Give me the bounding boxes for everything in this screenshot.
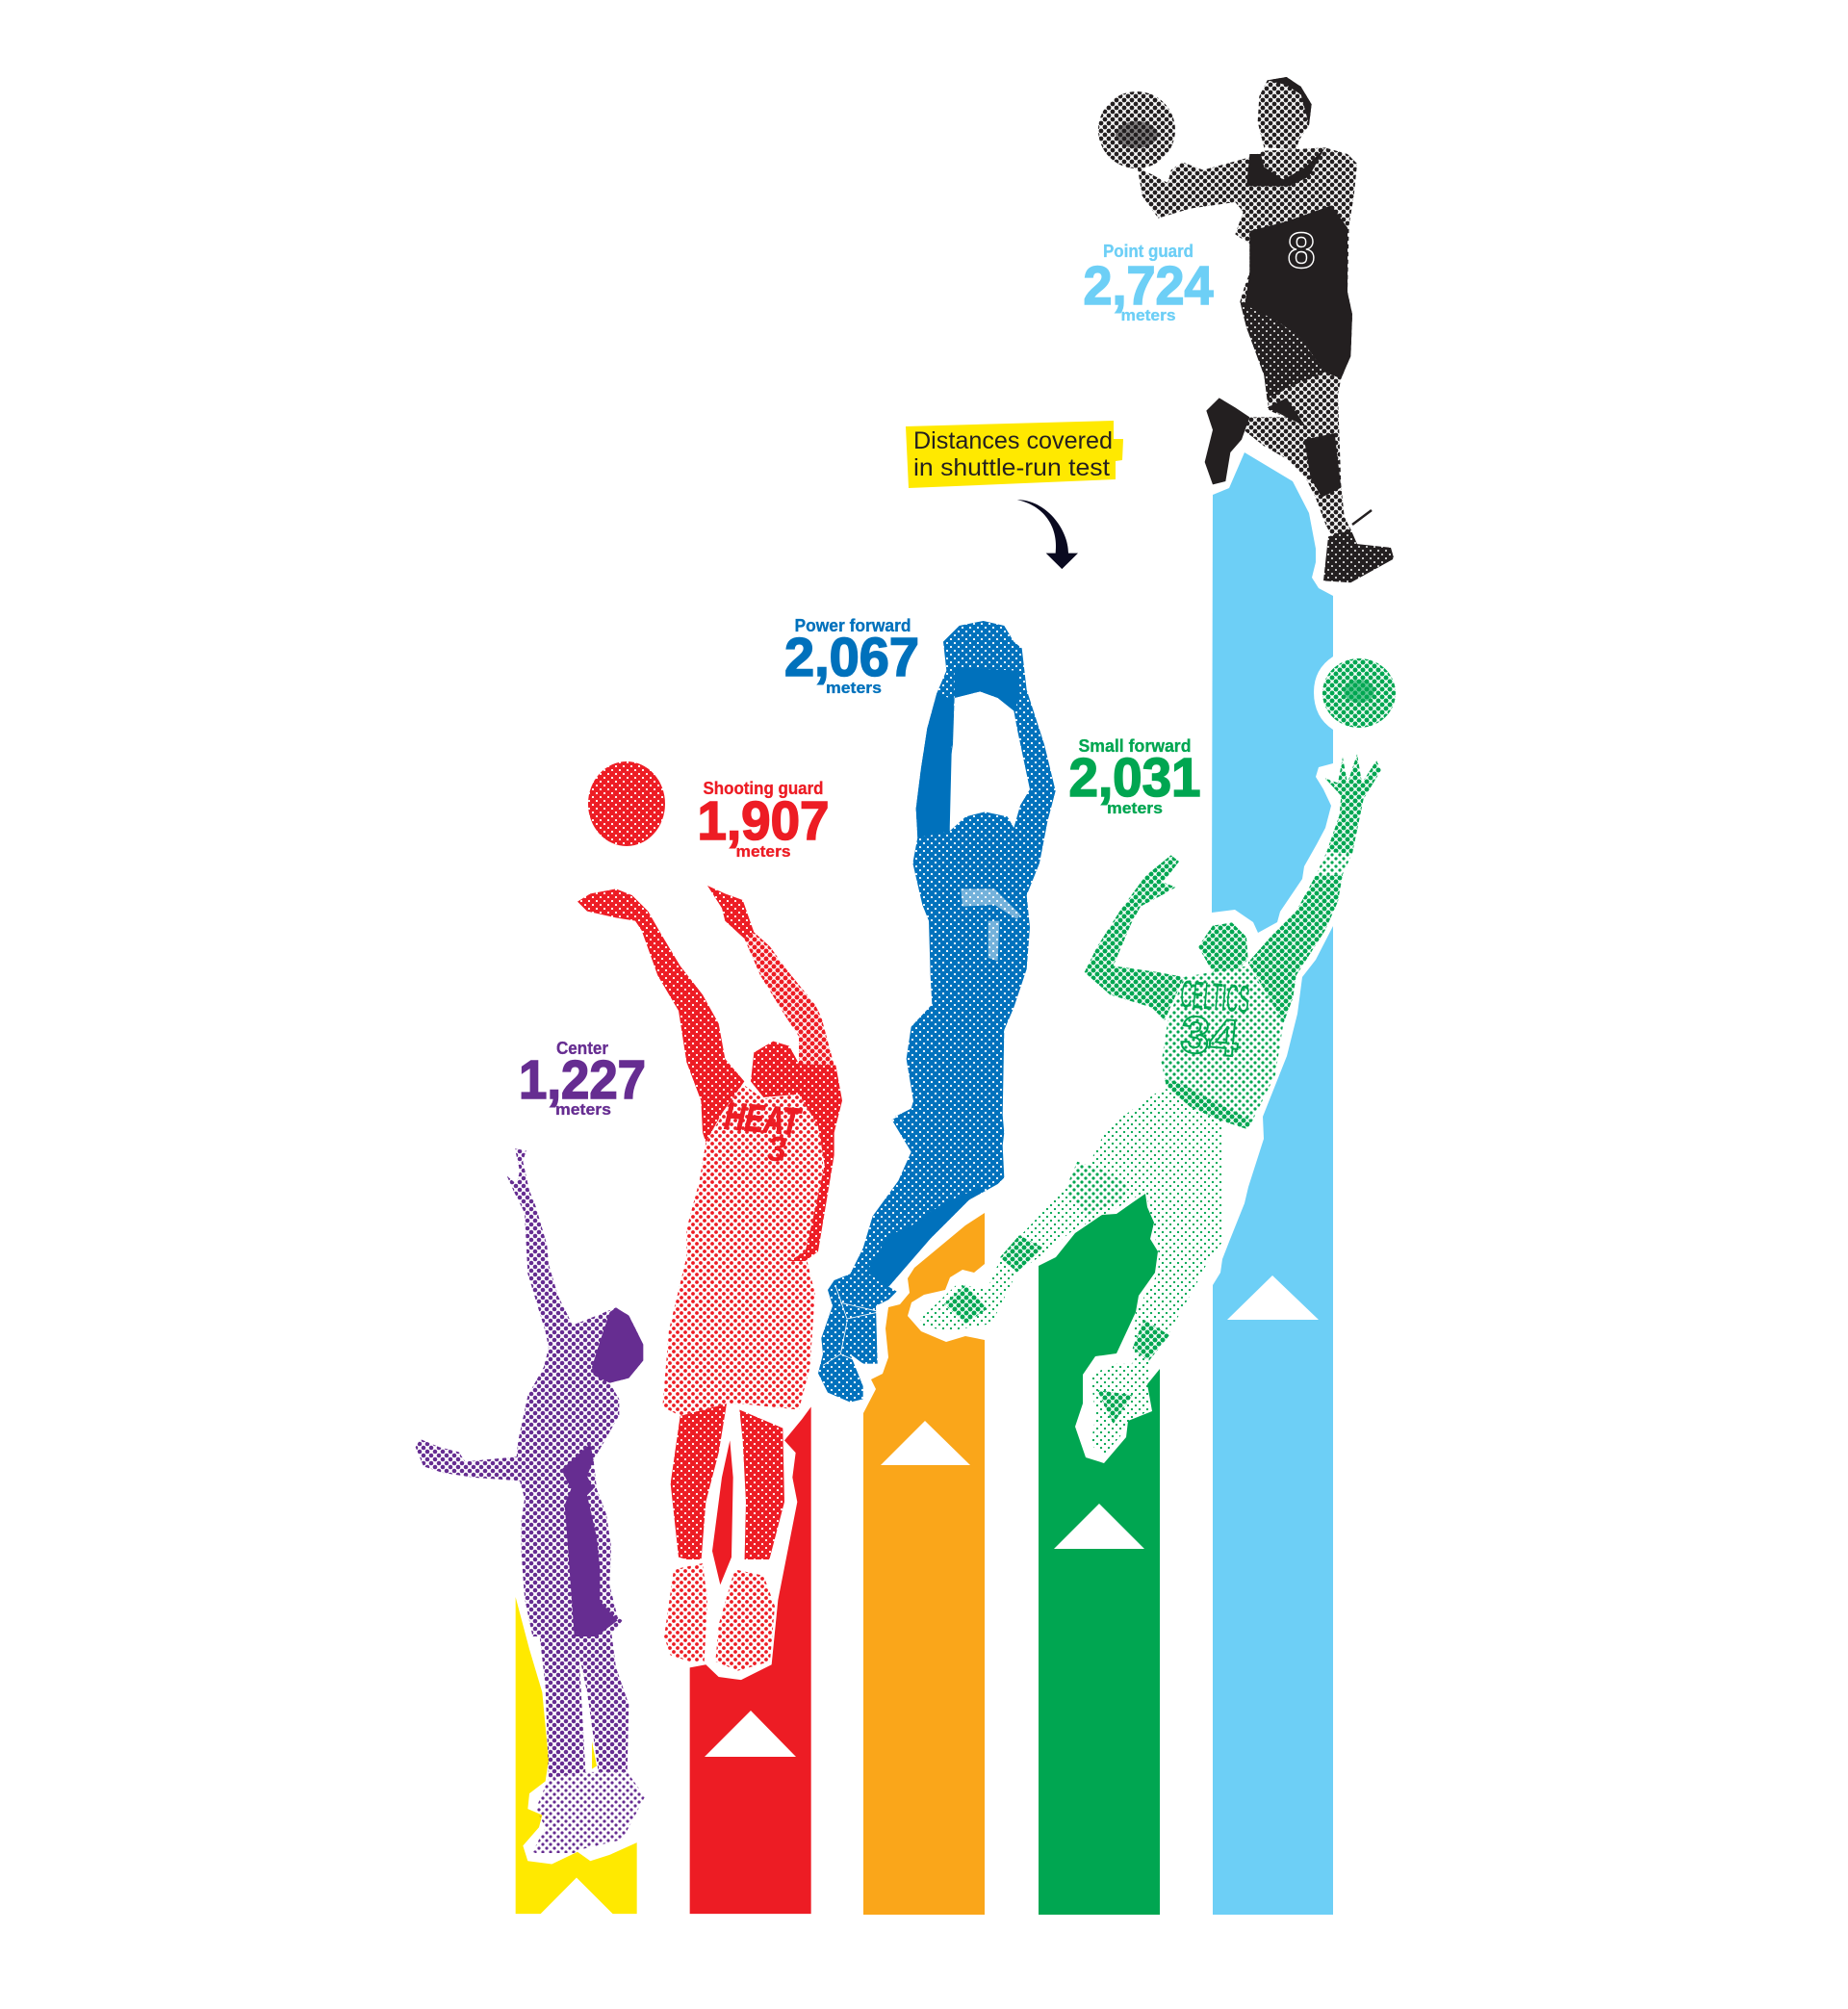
label: small forward: Small forward xyxy=(1078,736,1192,756)
jersey highlights xyxy=(961,889,1020,961)
ball xyxy=(1098,91,1175,168)
ball: shooting guard xyxy=(588,761,665,846)
label: small forward: meters xyxy=(1107,799,1163,817)
jersey number: 8 xyxy=(1288,223,1315,279)
label: small forward: 2,031 xyxy=(1068,747,1201,809)
label: center: Center xyxy=(556,1039,608,1058)
bar: power forward, orange xyxy=(863,1213,985,1915)
player: small forward, green halftone xyxy=(914,751,1453,1482)
player: point guard, black halftone xyxy=(1098,72,1400,587)
player: shooting guard, red halftone xyxy=(578,881,857,1680)
label: shooting guard: 1,907 xyxy=(697,790,830,852)
jersey number: 34 xyxy=(1178,1005,1241,1068)
ball: small forward xyxy=(1322,658,1396,728)
arrow marker: red bar xyxy=(705,1711,796,1757)
callout: distances covered in shuttle-run test: Distances covered xyxy=(913,427,1113,454)
bar: shooting guard, red xyxy=(690,1406,811,1914)
player: power forward, blue halftone xyxy=(818,616,1068,1415)
player: small forward, green halftone: CELTICS xyxy=(1179,973,1251,1021)
label: center: meters xyxy=(555,1100,611,1119)
chart: five distance bars xyxy=(516,452,1333,1915)
arrow marker: orange bar xyxy=(881,1421,970,1465)
bar: small forward, green xyxy=(1039,1194,1160,1915)
player: center, purple halftone xyxy=(409,1141,650,1853)
label: point guard: 2,724 xyxy=(1084,255,1214,317)
bar: center, yellow xyxy=(516,1597,637,1914)
callout: distances covered in shuttle-run test xyxy=(906,421,1123,488)
label: shooting guard: meters xyxy=(735,842,791,861)
label: point guard: meters xyxy=(1120,306,1176,324)
label: point guard: Point guard xyxy=(1103,242,1194,261)
label: power forward: meters xyxy=(826,679,882,697)
jersey lettering: HEAT xyxy=(723,1095,804,1145)
label: shooting guard: Shooting guard xyxy=(703,779,824,798)
shoe straps xyxy=(823,1287,878,1365)
bar: point guard, light blue xyxy=(1212,452,1333,1915)
arrow: curved pointer from callout to chart xyxy=(1017,500,1078,569)
label: center: 1,227 xyxy=(519,1049,646,1111)
shoelace xyxy=(1352,510,1372,525)
label: power forward: Power forward xyxy=(795,616,911,635)
arrow marker: light blue bar xyxy=(1227,1275,1319,1320)
callout: distances covered in shuttle-run test: in shuttle-run test xyxy=(913,454,1110,481)
jersey number: 3 xyxy=(767,1129,786,1169)
arrow marker: green bar xyxy=(1054,1504,1144,1549)
label: power forward: 2,067 xyxy=(784,627,919,688)
